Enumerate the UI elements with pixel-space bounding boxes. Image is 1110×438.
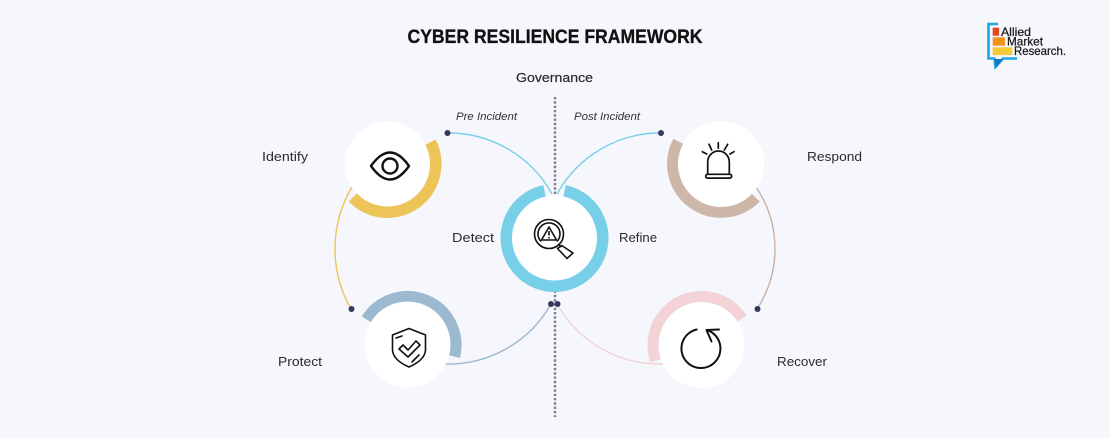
logo: Allied Market Research [988,24,1066,68]
connector: identify to protect [335,187,352,309]
logo: Allied Market Research: Research. [1014,44,1066,58]
label: Protect: Protect [278,354,322,369]
label: Post Incident: Post Incident [574,111,641,123]
icon: circular arrow [681,330,720,368]
label: Refine: Refine [619,230,657,245]
icon: eye [371,152,409,180]
label: Identify: Identify [262,149,309,164]
heading: Governance: Governance [516,70,593,85]
node: Respond [673,121,764,212]
node: Detect / Refine [507,191,603,286]
label: Recover: Recover [777,354,828,369]
label: Pre Incident: Pre Incident [456,111,518,123]
connector: protect to center [445,304,551,364]
node: Recover [653,297,744,388]
connector: respond to recover [756,187,775,309]
logo: Allied Market Research: Allied [1001,25,1031,39]
logo: Allied Market Research: Market [1007,34,1044,48]
icon: magnifier with alert [534,220,573,258]
label: Respond: Respond [807,149,862,164]
governance dashed axis [554,97,556,417]
label: Detect: Detect [452,230,494,245]
node: Protect [364,297,456,388]
icon: alarm siren [702,143,734,178]
node: Identify [345,122,435,212]
connector dots [348,130,760,312]
title: CYBER RESILIENCE FRAMEWORK [408,26,702,48]
connector: recover to center [557,304,663,364]
connector: identify to detect [448,133,552,194]
connector: respond from detect [557,133,661,194]
icon: shield with check [392,328,426,367]
